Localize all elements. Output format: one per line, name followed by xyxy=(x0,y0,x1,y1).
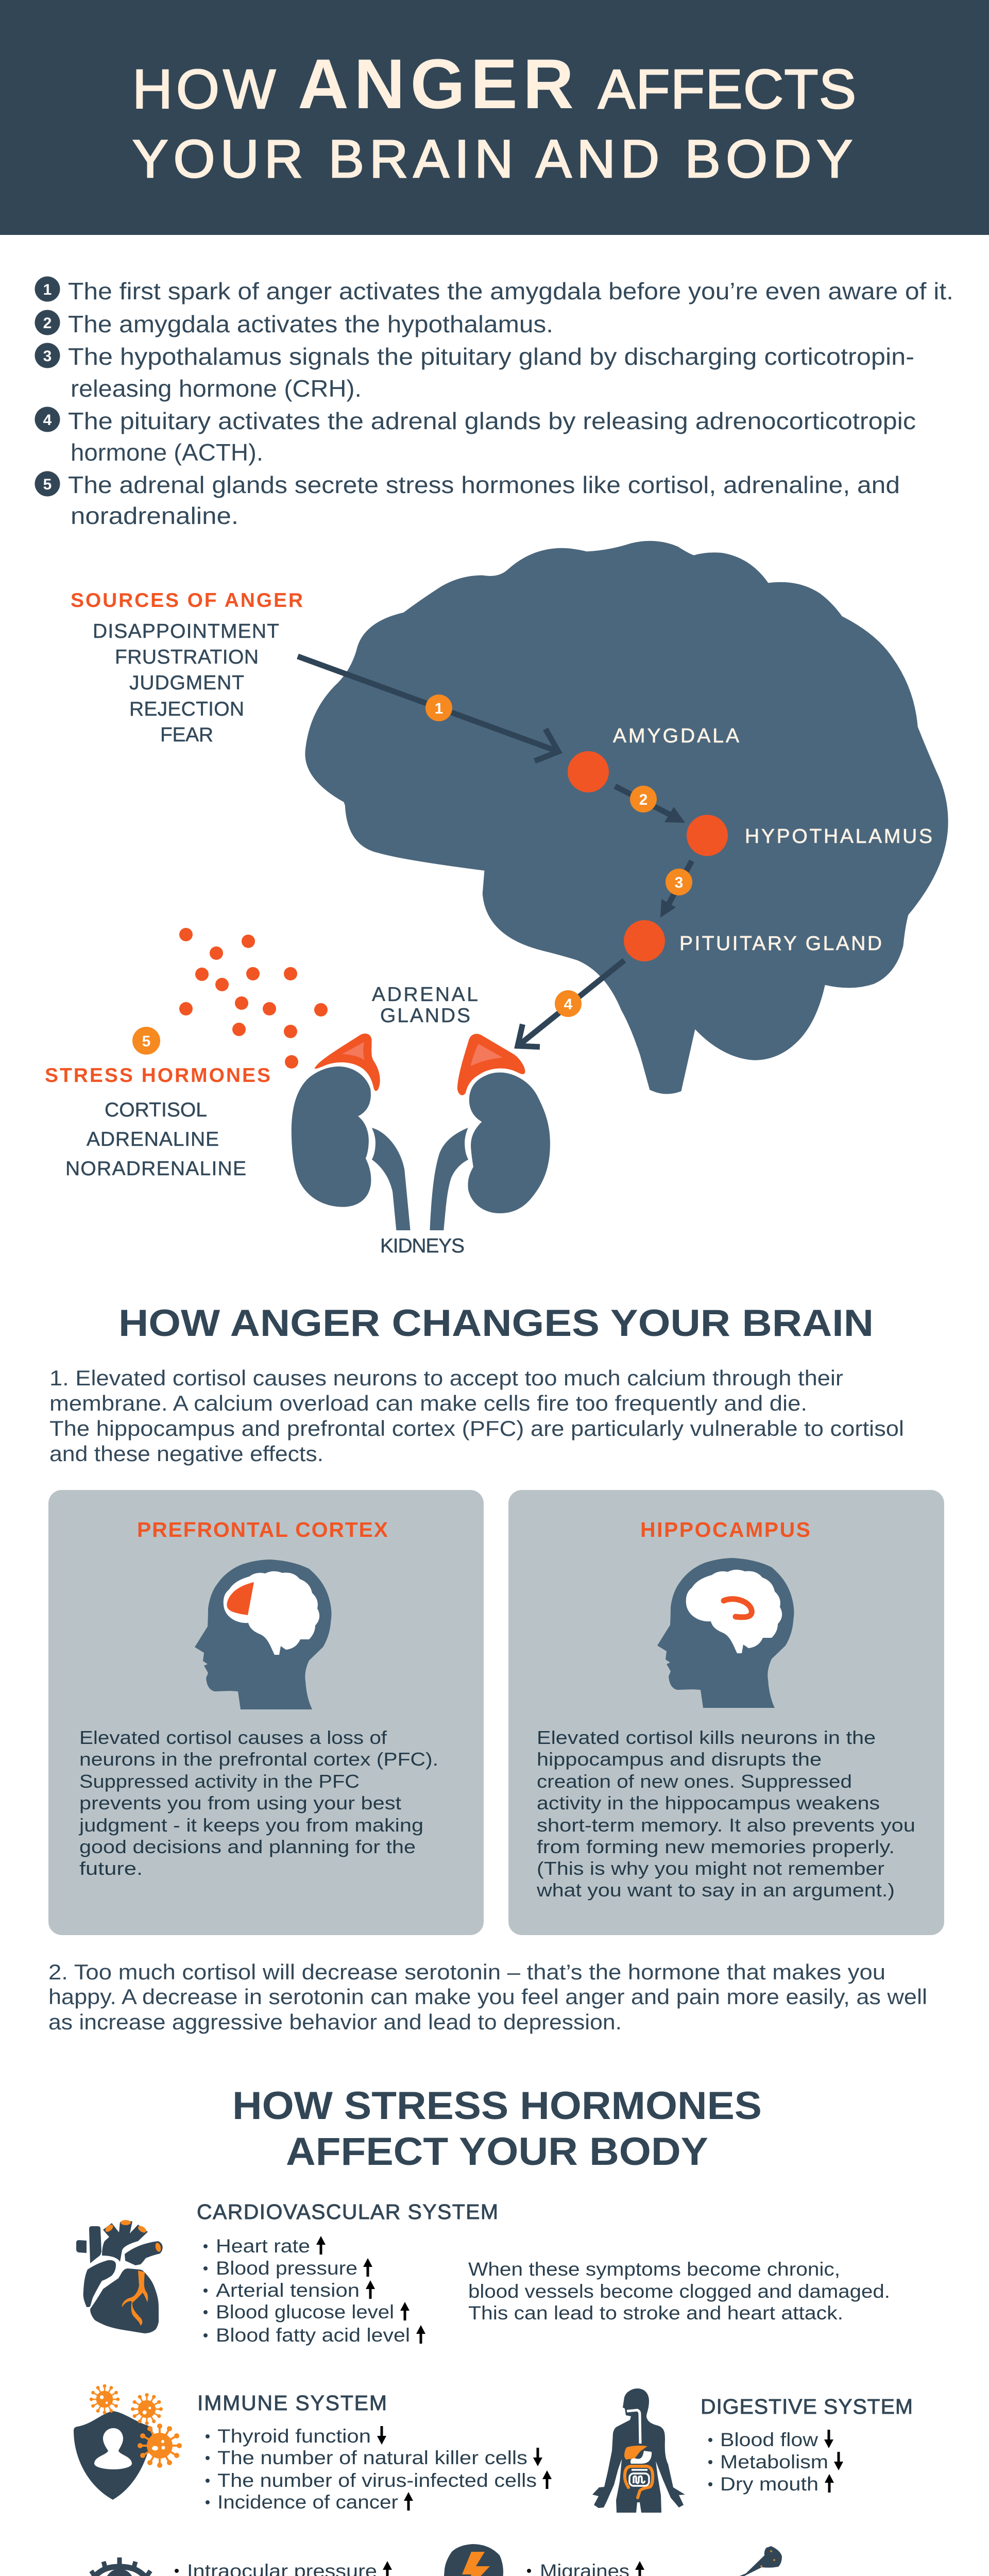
cardiovascular note xyxy=(468,2259,890,2324)
title xyxy=(132,45,856,189)
cardiovascular note: When these symptoms become chronic, xyxy=(468,2259,840,2280)
cardiovascular list: Heart rate xyxy=(216,2235,310,2257)
prefrontal cortex text: prevents you from using your best xyxy=(79,1792,401,1814)
brain region labels: AMYGDALA xyxy=(613,725,739,747)
cardiovascular system: CARDIOVASCULAR SYSTEM xyxy=(197,2200,498,2224)
adrenal glands label: GLANDS xyxy=(380,1005,470,1027)
prefrontal cortex text: Suppressed activity in the PFC xyxy=(79,1771,360,1792)
stress hormones label xyxy=(45,1064,270,1180)
paragraph 2 xyxy=(48,1960,927,2034)
brain region labels xyxy=(613,725,932,955)
prefrontal cortex heading: PREFRONTAL CORTEX xyxy=(137,1518,388,1541)
hippocampus text: (This is why you might not remember xyxy=(537,1858,884,1879)
immune list: Thyroid function xyxy=(217,2426,371,2447)
numbered steps list: The adrenal glands secrete stress hormones like cortisol, adrenaline, and xyxy=(68,471,900,498)
digestive list: Blood flow xyxy=(720,2429,818,2450)
sources of anger: REJECTION xyxy=(129,698,244,720)
stress hormones label: CORTISOL xyxy=(105,1099,207,1121)
digestive list: Metabolism xyxy=(720,2451,828,2472)
numbered steps list: 4 xyxy=(43,412,52,429)
orange step numbers: 5 xyxy=(142,1033,150,1050)
stress hormone particles xyxy=(179,928,328,1069)
prefrontal cortex text: good decisions and planning for the xyxy=(79,1836,416,1857)
icon: shield with viruses xyxy=(74,2386,179,2500)
cardiovascular list: Blood glucose level xyxy=(216,2301,394,2323)
adrenal glands label: ADRENAL xyxy=(372,984,478,1006)
numbered steps list: noradrenaline. xyxy=(71,502,238,529)
kidneys and adrenal glands xyxy=(292,1033,550,1230)
sources of anger: DISAPPOINTMENT xyxy=(93,620,279,642)
kidneys label: KIDNEYS xyxy=(380,1235,465,1257)
prefrontal cortex text: judgment - it keeps you from making xyxy=(79,1815,423,1836)
brain hot spots xyxy=(568,751,728,961)
hippocampus text: Elevated cortisol kills neurons in the xyxy=(537,1727,876,1748)
hippocampus text: short-term memory. It also prevents you xyxy=(537,1815,915,1836)
adrenal glands label xyxy=(372,984,478,1027)
orange step numbers: 1 xyxy=(435,700,443,717)
sources of anger: JUDGMENT xyxy=(129,672,244,694)
icon: eye xyxy=(88,2557,152,2576)
stress hormones label: NORADRENALINE xyxy=(65,1158,246,1180)
arrow 3: hypothalamus to pituitary xyxy=(660,861,692,918)
arrow 2: amygdala to hypothalamus xyxy=(615,786,685,823)
immune list: Incidence of cancer xyxy=(217,2492,398,2513)
hippocampus text: creation of new ones. Suppressed xyxy=(537,1771,852,1792)
sources of anger: SOURCES OF ANGER xyxy=(71,589,303,612)
icon: bone xyxy=(700,2546,782,2576)
heading: how stress hormones affect your body: AFFECT YOUR BODY xyxy=(286,2130,708,2174)
numbered steps list: 5 xyxy=(43,476,52,493)
brain region labels: PITUITARY GLAND xyxy=(679,933,882,955)
orange step numbers xyxy=(132,694,692,1055)
digestive list: Dry mouth xyxy=(720,2473,819,2495)
hippocampus text xyxy=(536,1727,915,1901)
numbered steps list: The pituitary activates the adrenal glands by releasing adrenocorticotropic xyxy=(68,408,916,434)
head list xyxy=(527,2561,655,2576)
numbered steps list: hormone (ACTH). xyxy=(71,439,263,466)
heading: how stress hormones affect your body: HOW STRESS HORMONES xyxy=(232,2084,762,2128)
paragraph 2: 2. Too much cortisol will decrease serotonin – that’s the hormone that makes you xyxy=(48,1960,885,1984)
head icon with hippocampus highlighted xyxy=(657,1558,794,1708)
cardiovascular system xyxy=(197,2200,890,2346)
cardiovascular note: This can lead to stroke and heart attack. xyxy=(468,2302,843,2324)
sources of anger: FEAR xyxy=(160,724,213,746)
prefrontal cortex text xyxy=(79,1727,438,1879)
paragraph 1: and these negative effects. xyxy=(49,1442,323,1466)
arrow 1: sources to amygdala xyxy=(298,656,558,761)
head icon with prefrontal cortex highlighted xyxy=(195,1560,332,1709)
panel: hippocampus xyxy=(508,1490,944,1935)
prefrontal cortex text: neurons in the prefrontal cortex (PFC). xyxy=(79,1749,438,1770)
orange step numbers: 3 xyxy=(675,874,683,891)
icon: head with lightning bolt xyxy=(439,2544,503,2576)
digestive system: DIGESTIVE SYSTEM xyxy=(701,2395,913,2418)
hippocampus text: from forming new memories properly. xyxy=(537,1836,895,1857)
header banner xyxy=(0,0,989,235)
prefrontal cortex text: Elevated cortisol causes a loss of xyxy=(79,1727,387,1748)
sources of anger: FRUSTRATION xyxy=(115,646,259,668)
numbered steps list: The hypothalamus signals the pituitary gland by discharging corticotropin- xyxy=(68,343,914,370)
paragraph 2: as increase aggressive behavior and lead to depression. xyxy=(48,2010,622,2034)
title: ANGER xyxy=(298,45,574,124)
stress hormones label: STRESS HORMONES xyxy=(45,1064,270,1087)
sources of anger xyxy=(71,589,303,746)
cardiovascular note: blood vessels become clogged and damaged. xyxy=(468,2281,890,2302)
numbered steps list: releasing hormone (CRH). xyxy=(71,375,362,402)
paragraph 2: happy. A decrease in serotonin can make you feel anger and pain more easily, as well xyxy=(48,1985,927,2009)
orange step numbers: 2 xyxy=(639,791,647,808)
immune system: IMMUNE SYSTEM xyxy=(197,2391,387,2415)
arrow 4: pituitary to adrenal glands xyxy=(518,960,624,1047)
title: AFFECTS xyxy=(598,58,856,120)
panel: prefrontal cortex xyxy=(48,1490,484,1935)
hippocampus text: what you want to say in an argument.) xyxy=(536,1879,895,1901)
cardiovascular list: Blood fatty acid level xyxy=(216,2325,410,2346)
immune system xyxy=(197,2391,552,2513)
prefrontal cortex text: future. xyxy=(79,1858,143,1879)
icon: digestive body xyxy=(592,2388,685,2513)
brain region labels: HYPOTHALAMUS xyxy=(745,825,932,848)
numbered steps list xyxy=(35,276,953,529)
title: HOW xyxy=(132,58,276,120)
digestive system xyxy=(701,2395,913,2495)
hippocampus text: activity in the hippocampus weakens xyxy=(537,1792,880,1814)
paragraph 1: 1. Elevated cortisol causes neurons to accept too much calcium through their xyxy=(49,1366,843,1390)
paragraph 1 xyxy=(49,1366,904,1466)
digestive list xyxy=(708,2429,843,2495)
cardiovascular list xyxy=(203,2235,425,2346)
paragraph 1: The hippocampus and prefrontal cortex (PFC) are particularly vulnerable to cortisol xyxy=(49,1416,904,1440)
stress hormones label: ADRENALINE xyxy=(87,1128,219,1150)
immune list: The number of natural killer cells xyxy=(217,2447,527,2468)
cardiovascular list: Blood pressure xyxy=(216,2258,357,2279)
paragraph 1: membrane. A calcium overload can make cells fire too frequently and die. xyxy=(49,1391,807,1415)
heading: how anger changes your brain: HOW ANGER CHANGES YOUR BRAIN xyxy=(118,1302,874,1344)
numbered steps list: 1 xyxy=(43,281,52,298)
immune list: The number of virus-infected cells xyxy=(217,2470,537,2491)
brain silhouette xyxy=(305,541,948,1094)
hippocampus heading: HIPPOCAMPUS xyxy=(640,1518,810,1541)
immune list xyxy=(206,2426,552,2513)
numbered steps list: 2 xyxy=(43,315,52,332)
heading: how stress hormones affect your body xyxy=(232,2084,762,2174)
title: YOUR BRAIN AND BODY xyxy=(132,129,852,189)
numbered steps list: The amygdala activates the hypothalamus. xyxy=(68,311,553,337)
cardiovascular list: Arterial tension xyxy=(216,2280,360,2301)
orange step numbers: 4 xyxy=(564,996,573,1013)
numbered steps list: 3 xyxy=(43,348,52,365)
numbered steps list: The first spark of anger activates the amygdala before you’re even aware of it. xyxy=(68,278,953,304)
icon: heart xyxy=(76,2220,163,2333)
hippocampus text: hippocampus and disrupts the xyxy=(537,1749,822,1770)
